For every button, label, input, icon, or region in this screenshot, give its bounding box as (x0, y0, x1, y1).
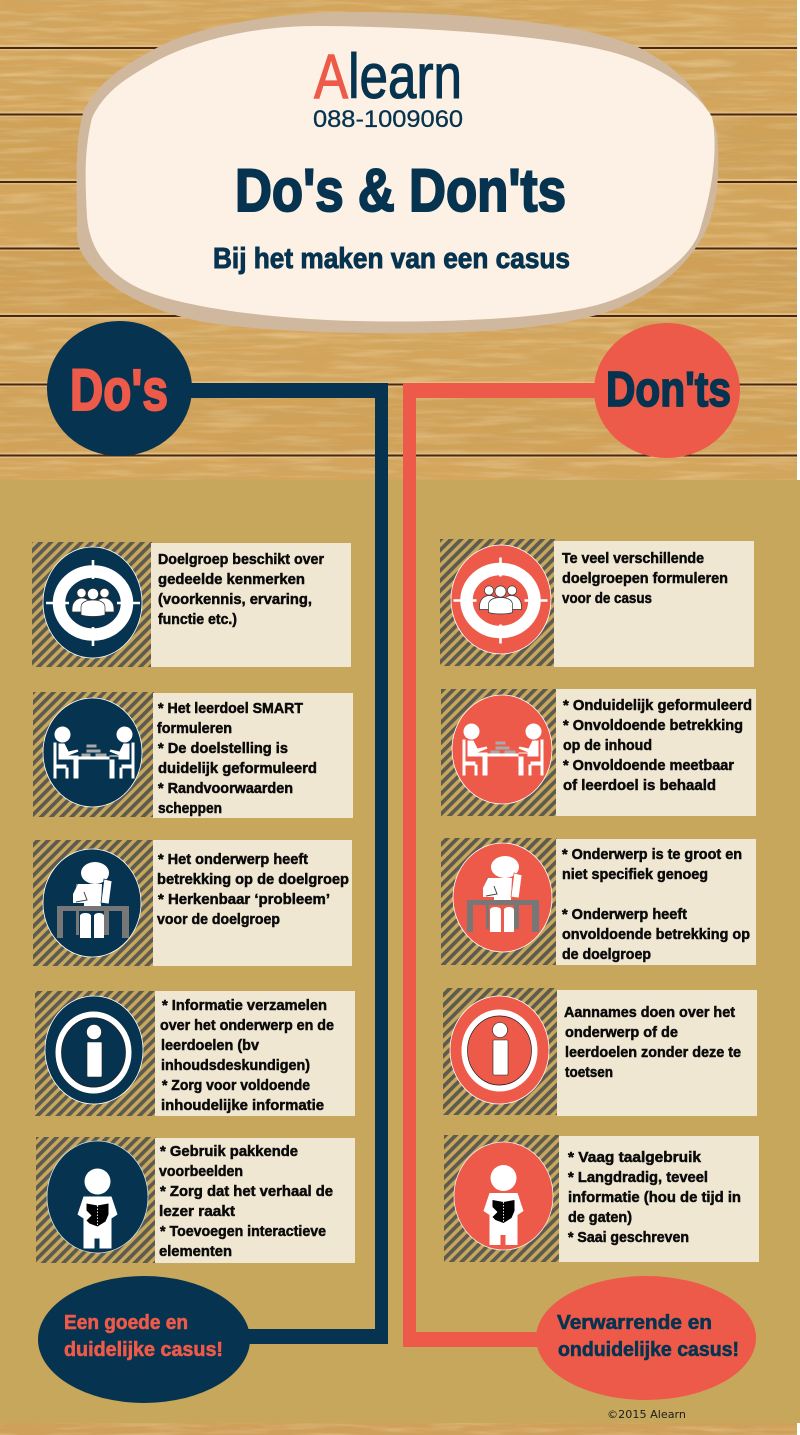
text: dont 5: informatie (hou de tijd in (568, 1189, 741, 1206)
text: do 2: formuleren (157, 720, 232, 737)
icon: reader red (454, 1142, 553, 1250)
text: dont 4 (564, 1004, 741, 1081)
conclusion: bad case: onduidelijke casus! (558, 1339, 739, 1361)
panel: dont 1 doelgroepen (440, 539, 754, 667)
panel: dont 4 aannames (443, 988, 757, 1116)
connector: don'ts line (403, 383, 596, 1347)
text: do 4: leerdoelen (bv (161, 1037, 260, 1054)
text: dont 1: doelgroepen formuleren (562, 570, 728, 587)
subtitle: Bij het maken van een casus (213, 243, 570, 275)
text: do 2: scheppen (158, 800, 222, 817)
panel: do 4 informatie (35, 991, 355, 1116)
text: dont 3: onvoldoende betrekking op (562, 926, 750, 943)
badge: Do's: Do's (70, 358, 168, 423)
text: do 1: functie etc.) (158, 611, 237, 628)
text: dont 4: leerdoelen zonder deze te (565, 1044, 741, 1061)
text: do 4: inhoudsdeskundigen) (161, 1057, 310, 1074)
conclusion: good case: Een goede en (64, 1312, 188, 1334)
panel: dont 2 onduidelijk (441, 689, 756, 816)
gold lower panel (0, 480, 800, 1423)
text: dont 4: Aannames doen over het (564, 1004, 735, 1021)
text: do 5 (159, 1143, 333, 1260)
text: do 5: * Gebruik pakkende (160, 1143, 298, 1160)
text: dont 5: * Saai geschreven (568, 1229, 689, 1246)
conclusion: bad case: Verwarrende en (557, 1312, 712, 1334)
text: do 4: * Zorg voor voldoende (162, 1077, 310, 1094)
text: do 2: * Randvoorwaarden (158, 780, 293, 797)
text: do 4: * Informatie verzamelen (162, 997, 327, 1014)
text: do 4: inhoudelijke informatie (161, 1097, 324, 1114)
panel: do 2 leerdoel (33, 692, 353, 818)
text: do 5: voorbeelden (159, 1163, 243, 1180)
text: dont 5: de gaten) (568, 1209, 632, 1226)
icon: info (45, 996, 143, 1104)
text: dont 2: op de inhoud (563, 737, 652, 754)
text: dont 2: * Onvoldoende meetbaar (563, 757, 734, 774)
header blob (77, 12, 718, 333)
panel: do 5 voorbeelden (36, 1137, 355, 1263)
bottom wood strip (0, 1423, 797, 1435)
text: dont 3 (562, 846, 750, 963)
text: do 2: duidelijk geformuleerd (158, 760, 317, 777)
text: dont 3: niet specifiek genoeg (562, 866, 708, 883)
text: dont 5 (568, 1149, 741, 1246)
text: do 5: elementen (159, 1243, 232, 1260)
text: dont 3: * Onderwerp heeft (562, 906, 687, 923)
icon: table meeting red (452, 695, 552, 804)
text: dont 4: onderwerp of de (565, 1024, 678, 1041)
text: do 2: * Het leerdoel SMART (158, 700, 303, 717)
text: dont 5: * Vaag taalgebruik (568, 1149, 702, 1166)
wood background (0, 0, 797, 480)
panel: dont 5 taalgebruik (444, 1135, 759, 1262)
text: dont 1: voor de casus (562, 590, 652, 607)
text: dont 3: de doelgroep (562, 946, 651, 963)
title: Do's & Don'ts (235, 157, 566, 224)
text: do 1: (voorkennis, ervaring, (158, 591, 312, 608)
text: dont 1 (562, 550, 728, 607)
text: do 3: * Het onderwerp heeft (158, 851, 308, 868)
icon: info red (450, 996, 549, 1104)
icon: person at desk red (453, 843, 552, 952)
text: do 4 (160, 997, 334, 1114)
text: do 2: * De doelstelling is (158, 740, 288, 757)
text: do 3: betrekking op de doelgroep (157, 871, 349, 888)
text: do 3 (157, 851, 349, 928)
icon: target group red (451, 545, 551, 654)
text: dont 4: toetsen (565, 1064, 613, 1081)
icon: table meeting (43, 698, 142, 807)
badge: Don'ts (594, 323, 740, 458)
phone number: 088-1009060 (313, 106, 463, 133)
text: do 2 (157, 700, 317, 817)
text: do 3: voor de doelgroep (157, 911, 280, 928)
conclusion: bad case (536, 1276, 756, 1400)
icon: person at desk (43, 849, 141, 957)
text: do 5: * Toevoegen interactieve (160, 1223, 326, 1240)
conclusion: good case: duidelijke casus! (64, 1339, 223, 1361)
badge: Don'ts: Don'ts (606, 363, 731, 417)
panel: dont 3 onderwerp (441, 838, 756, 965)
text: do 5: * Zorg dat het verhaal de (160, 1183, 333, 1200)
panel: do 3 onderwerp (33, 840, 352, 966)
text: do 1 (158, 551, 324, 628)
panel: do 1 doelgroep (32, 542, 351, 667)
text: dont 5: * Langdradig, teveel (568, 1169, 708, 1186)
text: dont 2: * Onduidelijk geformuleerd (563, 697, 752, 714)
text: dont 2: of leerdoel is behaald (563, 777, 716, 794)
text: do 5: lezer raakt (159, 1203, 235, 1220)
logo: Alearn: Alearn (314, 42, 462, 112)
text: dont 1: Te veel verschillende (562, 550, 704, 567)
text: do 3: * Herkenbaar ‘probleem’ (158, 891, 330, 908)
text: dont 2 (563, 697, 752, 794)
text: do 1: gedeelde kenmerken (158, 571, 305, 588)
text: do 4: over het onderwerp en de (160, 1017, 334, 1034)
copyright: ©2015 Alearn (607, 1408, 686, 1421)
icon: target group (43, 547, 142, 658)
icon: reader (47, 1141, 148, 1253)
connector: do's line (190, 383, 388, 1344)
text: do 1: Doelgroep beschikt over (158, 551, 324, 568)
conclusion: good case (38, 1276, 250, 1403)
text: dont 3: * Onderwerp is te groot en (562, 846, 742, 863)
text: dont 2: * Onvoldoende betrekking (563, 717, 743, 734)
badge: Do's (47, 321, 192, 456)
